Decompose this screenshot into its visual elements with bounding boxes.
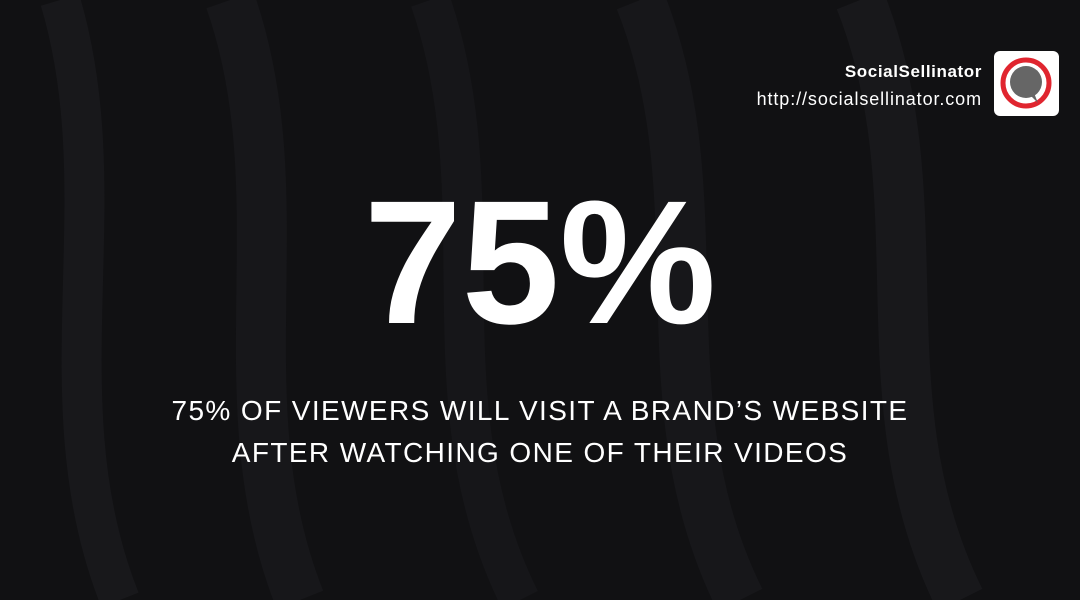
brand url: http://socialsellinator.com xyxy=(757,89,982,109)
brand block xyxy=(757,62,982,109)
description: 75% OF VIEWERS WILL VISIT A BRAND’S WEBSITE xyxy=(171,395,909,426)
icon: logo xyxy=(994,51,1059,116)
description xyxy=(171,395,909,468)
brand name: SocialSellinator xyxy=(845,62,982,81)
description: AFTER WATCHING ONE OF THEIR VIDEOS xyxy=(232,437,848,468)
big statistic: 75% xyxy=(364,165,716,361)
